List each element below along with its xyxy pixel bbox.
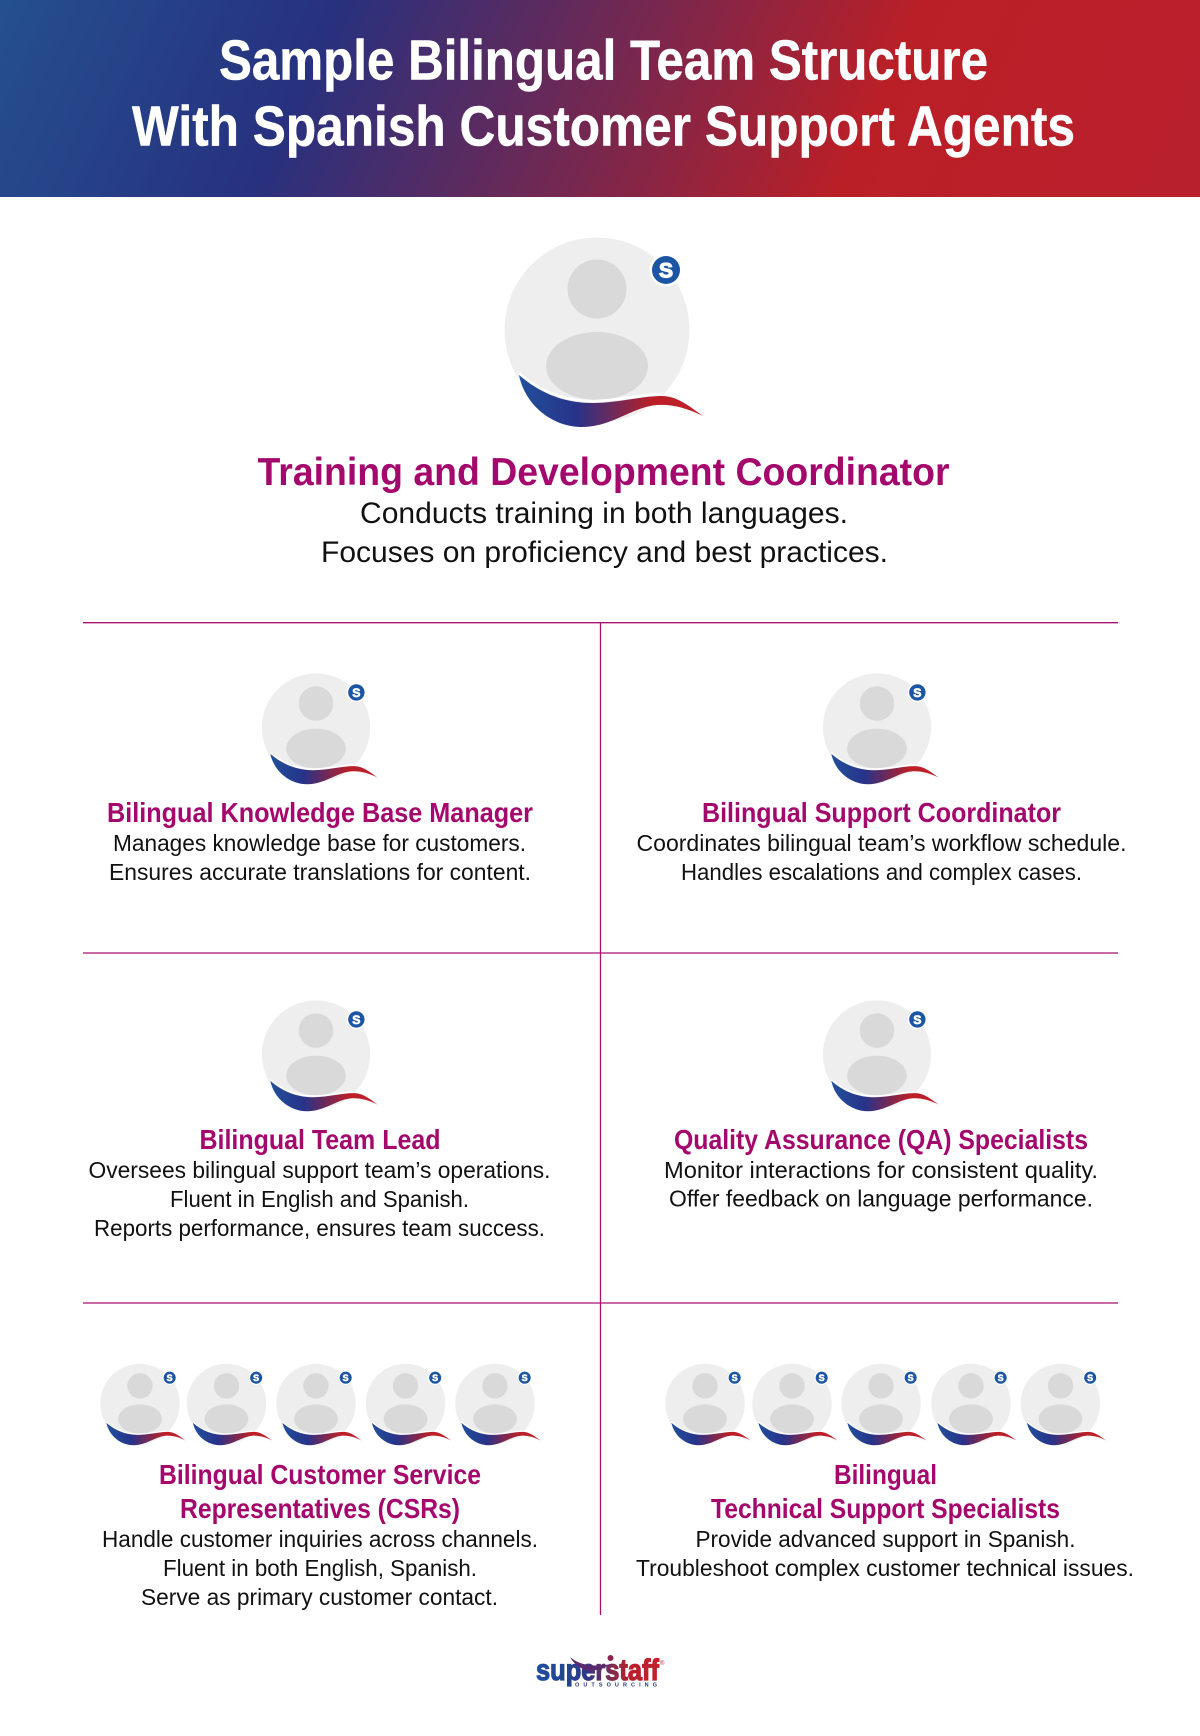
text: technical support description: Troubleshoot complex customer technical issues. bbox=[636, 1555, 1134, 1581]
heading: Bilingual Technical Support Specialists bbox=[711, 1459, 1060, 1524]
logo: SuperStaff Outsourcing: ® bbox=[660, 1660, 665, 1667]
text: CSR description bbox=[102, 1526, 538, 1610]
icon: row of five CSR avatars bbox=[100, 1364, 541, 1445]
panel: Bilingual Support Coordinator bbox=[636, 673, 1126, 885]
icon: manager avatar bbox=[262, 673, 378, 784]
text: CSR description: Serve as primary customer contact. bbox=[141, 1584, 498, 1610]
text: team lead description: Oversees bilingual support team’s operations. bbox=[88, 1157, 550, 1183]
text: CSR description: Handle customer inquiries across channels. bbox=[102, 1526, 538, 1552]
text: QA description: Monitor interactions for consistent quality. bbox=[664, 1157, 1098, 1183]
panel: Training and Development Coordinator bbox=[258, 238, 950, 569]
title: With Spanish Customer Support Agents bbox=[132, 94, 1075, 158]
text: coordinator description bbox=[321, 497, 888, 569]
heading: Quality Assurance (QA) Specialists: Quality Assurance (QA) Specialists bbox=[674, 1124, 1088, 1155]
text: technical support description: Provide advanced support in Spanish. bbox=[696, 1526, 1076, 1552]
panel: Bilingual Technical Support Specialists bbox=[636, 1364, 1134, 1581]
panel: Bilingual Team Lead bbox=[88, 1000, 550, 1241]
panel: Bilingual Knowledge Base Manager bbox=[107, 673, 533, 885]
text: team lead description: Fluent in English and Spanish. bbox=[170, 1186, 469, 1212]
heading: Bilingual Knowledge Base Manager: Bilingual Knowledge Base Manager bbox=[107, 797, 533, 828]
text: QA description: Offer feedback on language performance. bbox=[669, 1186, 1093, 1212]
title: Sample Bilingual Team Structure bbox=[219, 28, 988, 92]
logo: SuperStaff Outsourcing: superstaff bbox=[536, 1654, 660, 1687]
text: support coordinator description: Coordinates bilingual team’s workflow schedule. bbox=[636, 830, 1126, 856]
text: coordinator description: Focuses on proficiency and best practices. bbox=[321, 536, 888, 569]
heading: Bilingual Team Lead: Bilingual Team Lead bbox=[200, 1124, 440, 1155]
text: team lead description: Reports performance, ensures team success. bbox=[94, 1215, 545, 1241]
text: technical support description bbox=[636, 1526, 1134, 1581]
title bbox=[132, 28, 1075, 158]
icon: support coordinator avatar bbox=[823, 673, 939, 784]
icon: coordinator avatar bbox=[504, 238, 703, 427]
heading: Bilingual Customer Service Representatives (CSRs): Representatives (CSRs) bbox=[180, 1493, 460, 1524]
header banner bbox=[0, 0, 1200, 197]
logo: SuperStaff Outsourcing: OUTSOURCING bbox=[575, 1682, 657, 1688]
heading: Training and Development Coordinator: Training and Development Coordinator bbox=[258, 451, 950, 494]
icon: team lead avatar bbox=[262, 1000, 378, 1111]
heading: Bilingual Support Coordinator: Bilingual Support Coordinator bbox=[702, 797, 1061, 828]
panel: Quality Assurance Specialists bbox=[664, 1000, 1098, 1212]
text: QA description bbox=[664, 1157, 1098, 1212]
heading: Bilingual Customer Service Representatives (CSRs): Bilingual Customer Service bbox=[159, 1459, 481, 1490]
heading: Bilingual Technical Support Specialists: Technical Support Specialists bbox=[711, 1493, 1060, 1524]
heading: Bilingual Technical Support Specialists: Bilingual bbox=[834, 1459, 937, 1490]
text: support coordinator description: Handles escalations and complex cases. bbox=[681, 859, 1082, 885]
text: manager description: Manages knowledge base for customers. bbox=[113, 830, 526, 856]
icon: QA avatar bbox=[823, 1000, 939, 1111]
panel: Bilingual Customer Service Representatives bbox=[100, 1364, 541, 1610]
text: CSR description: Fluent in both English, Spanish. bbox=[163, 1555, 477, 1581]
text: coordinator description: Conducts training in both languages. bbox=[360, 497, 848, 530]
heading: Bilingual Customer Service Representatives (CSRs) bbox=[159, 1459, 481, 1524]
text: manager description: Ensures accurate translations for content. bbox=[109, 859, 531, 885]
text: support coordinator description bbox=[636, 830, 1126, 885]
text: team lead description bbox=[88, 1157, 550, 1241]
text: manager description bbox=[109, 830, 531, 885]
icon: row of five technical support avatars bbox=[665, 1364, 1106, 1445]
